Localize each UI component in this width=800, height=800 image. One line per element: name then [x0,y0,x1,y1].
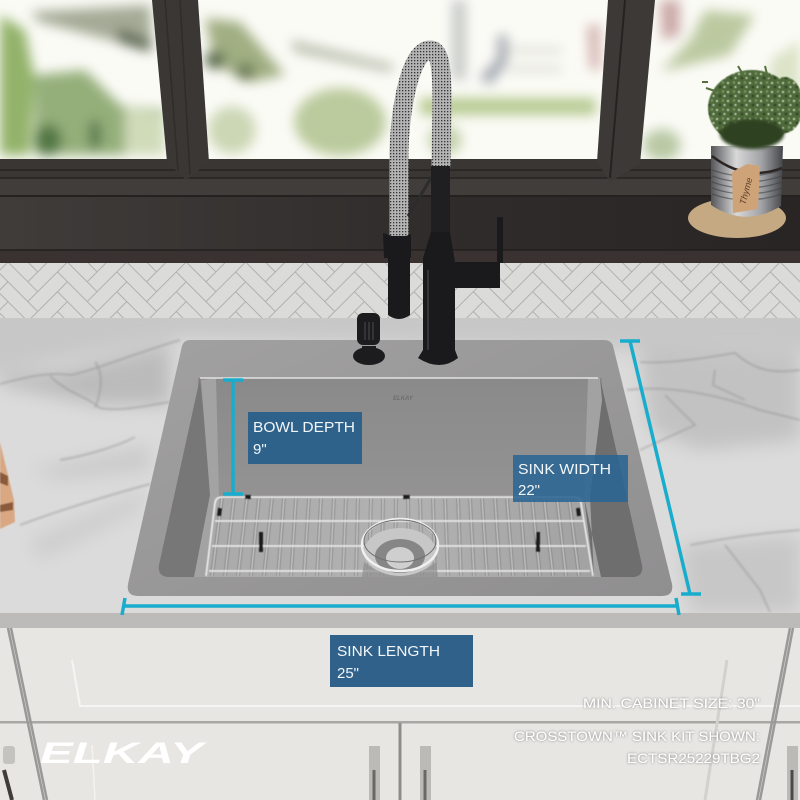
bowl back wall [198,378,602,498]
bottom grid rack [206,497,593,576]
logo on back wall: ELKAY [393,396,414,402]
lever [497,217,503,263]
tag handwriting: Thyme [738,176,754,206]
dimension line: sink width [620,341,701,594]
note: kit shown: ECTSR25229TBG2 [627,750,760,766]
herringbone backsplash [0,263,800,318]
metal can [711,146,783,217]
window frame: mullions [152,0,655,182]
twine [712,156,782,173]
highlight on body [427,270,429,350]
note: kit shown: CROSSTOWN™ SINK KIT SHOWN: [514,728,760,744]
sink [128,340,672,596]
faucet neck [431,166,450,240]
plant foliage [702,66,800,149]
note: minimum cabinet size: MIN. CABINET SIZE: 30" [583,695,760,711]
potted plant [688,66,800,238]
soap dispenser [353,313,385,365]
window sill and dark wood ledge [0,159,800,263]
window view background [0,0,800,165]
bowl left corner strip [194,378,219,577]
bowl right corner strip [584,378,602,577]
cork coaster [688,198,786,238]
bowl rim highlight [200,377,598,379]
faucet body [418,232,458,365]
dimension line: sink length [122,598,679,615]
handle [448,262,500,288]
bowl right wall [584,378,642,577]
cabinet handles [3,746,798,800]
label: sink length: 25" [337,665,359,682]
label: sink length: SINK LENGTH [337,643,440,660]
dimension line: bowl depth [223,380,243,494]
note: kit shown [514,728,760,766]
label: bowl depth [248,412,362,464]
bowl floor [206,497,594,577]
label: bowl depth: BOWL DEPTH [253,419,355,436]
pull-down head [383,233,411,319]
label: bowl depth: 9" [253,441,267,458]
faucet spout hose [399,50,442,236]
label: sink width: SINK WIDTH [518,461,611,478]
cabinets [0,628,800,800]
label: sink length [330,635,473,687]
cutting board edge at left [0,442,15,529]
can ribs [712,170,782,200]
bowl left wall [159,378,212,577]
sink deck [128,340,672,596]
marble countertop [0,300,800,628]
label: sink width [513,455,628,502]
support arm [408,170,436,216]
Elkay logo: ELKAY [40,737,208,770]
drain strainer [362,519,438,577]
tag [732,164,760,213]
label: sink width: 22" [518,482,540,499]
faucet [383,166,503,365]
